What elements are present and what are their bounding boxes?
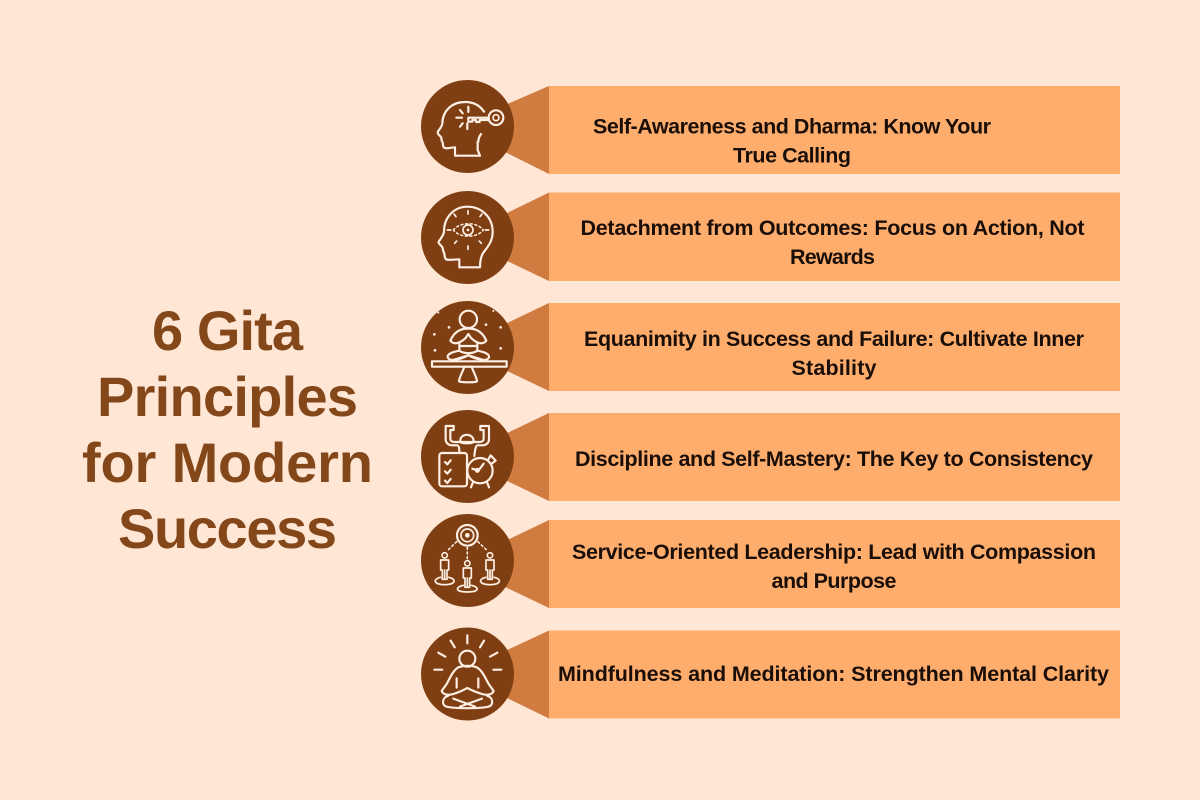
icon: meditating figure with rays — [434, 635, 501, 708]
label text: True Calling — [733, 144, 851, 168]
panel: mindfulness and meditation — [421, 628, 1120, 720]
icon: person with checklist and clock — [439, 426, 496, 487]
label text — [572, 540, 1096, 593]
icon: target with three people — [435, 525, 499, 592]
panel: service-oriented leadership — [421, 514, 1120, 608]
icon: meditating figure on balance — [432, 310, 507, 382]
title: for Modern — [82, 431, 373, 494]
panel: discipline and self-mastery — [421, 410, 1120, 503]
label text: Service-Oriented Leadership: Lead with Compassion — [572, 540, 1096, 564]
title: Principles — [97, 365, 358, 428]
label text: Mindfulness and Meditation: Strengthen Mental Clarity — [558, 662, 1109, 686]
label text: Self-Awareness and Dharma: Know Your — [593, 114, 992, 138]
label text: Discipline and Self-Mastery: The Key to Consistency — [575, 447, 1093, 471]
label text: Rewards — [790, 245, 875, 269]
panel: self-awareness and dharma — [421, 80, 1120, 174]
label text: Equanimity in Success and Failure: Cultivate Inner — [584, 327, 1085, 351]
title: Success — [118, 497, 337, 560]
panel: equanimity in success and failure — [421, 301, 1120, 394]
label text — [593, 114, 992, 168]
icon: head with eye — [439, 207, 493, 267]
label text — [584, 327, 1085, 380]
icon: head with key — [438, 102, 503, 156]
panel: detachment from outcomes — [421, 191, 1120, 284]
title: 6 Gita — [152, 299, 304, 362]
label text: Detachment from Outcomes: Focus on Action, Not — [580, 216, 1084, 240]
title — [82, 299, 373, 560]
label text: and Purpose — [772, 569, 897, 593]
label text — [580, 216, 1084, 269]
label text: Stability — [792, 356, 877, 380]
